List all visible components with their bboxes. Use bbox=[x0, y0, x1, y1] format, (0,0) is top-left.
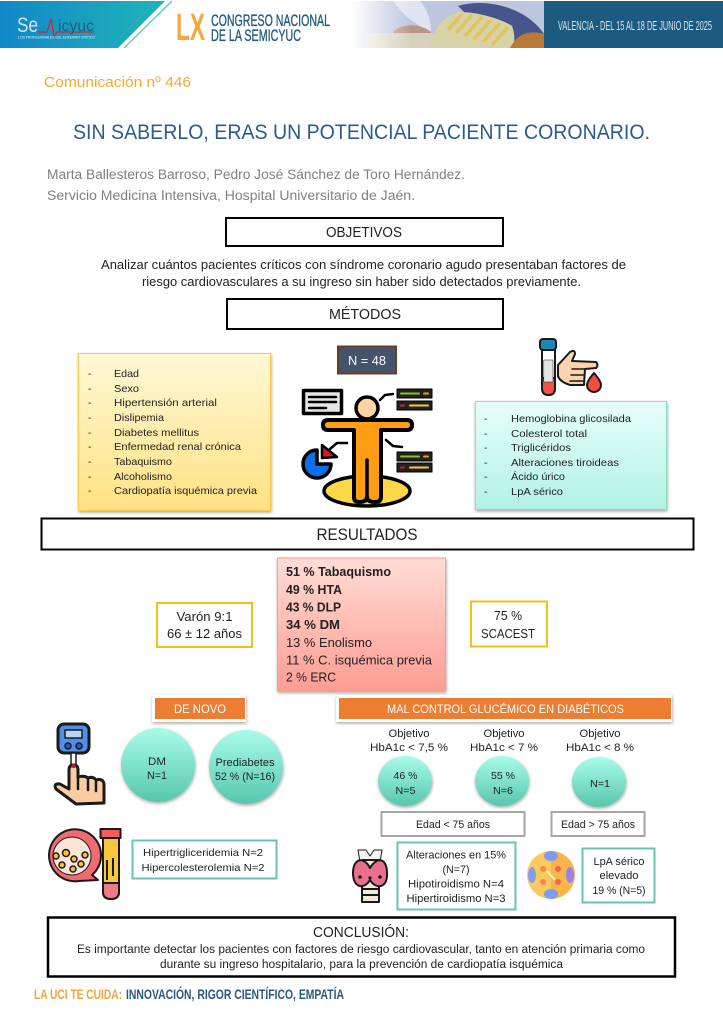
title: SIN SABERLO, ERAS UN POTENCIAL PACIENTE CORONARIO. bbox=[73, 121, 650, 144]
heading: de novo bbox=[152, 695, 246, 722]
circle: DM: DM bbox=[148, 756, 166, 768]
logo SEMICYUC: Se bbox=[17, 14, 38, 37]
panel: clinical variables: Alcoholismo bbox=[114, 471, 172, 483]
panel: clinical variables: - bbox=[88, 368, 92, 380]
logo SEMICYUC: icyuc bbox=[58, 18, 94, 35]
label: objetivo 7: Objetivo bbox=[484, 728, 524, 740]
panel: clinical variables: Diabetes mellitus bbox=[114, 427, 199, 439]
header diagonal line bbox=[124, 1, 172, 48]
circle: N=1: N=1 bbox=[590, 778, 610, 790]
panel: risk factor prevalence: 49 % HTA bbox=[286, 583, 342, 597]
objectives text: Analizar cuántos pacientes críticos con síndrome coronario agudo presentaban factores de bbox=[101, 258, 626, 272]
panel: laboratory variables: Hemoglobina glicosilada bbox=[511, 413, 631, 425]
header blue logo panel bbox=[0, 1, 165, 48]
circle: prediabetes bbox=[209, 730, 283, 804]
conclusion heading: CONCLUSIÓN: bbox=[313, 924, 409, 941]
label: objetivo 7,5: Objetivo bbox=[388, 728, 430, 740]
panel: laboratory variables: - bbox=[484, 413, 488, 425]
authors and affiliation: Marta Ballesteros Barroso, Pedro José Sánchez de Toro Hernández. bbox=[47, 167, 465, 182]
authors and affiliation bbox=[47, 167, 465, 203]
panel: clinical variables: Sexo bbox=[114, 383, 139, 395]
panel: laboratory variables: LpA sérico bbox=[511, 486, 563, 498]
panel: clinical variables: Tabaquismo bbox=[114, 456, 172, 468]
icon: person with data bbox=[303, 389, 432, 506]
panel: risk factor prevalence: 2 % ERC bbox=[286, 670, 336, 684]
panel: risk factor prevalence bbox=[278, 558, 446, 691]
sample size badge: N = 48 bbox=[348, 353, 386, 368]
panel: clinical variables: Enfermedad renal crónica bbox=[114, 441, 241, 453]
box: thyroid disorders: Hipotiroidismo N=4 bbox=[408, 878, 504, 890]
panel: laboratory variables: - bbox=[484, 457, 488, 469]
panel: clinical variables: - bbox=[88, 456, 92, 468]
circle: N=1 bbox=[572, 757, 626, 807]
circle: 46 % bbox=[378, 756, 432, 806]
label: objetivo 7: HbA1c < 7 % bbox=[470, 742, 538, 754]
panel: laboratory variables: Triglicéridos bbox=[511, 442, 571, 454]
congress numeral LX: LX bbox=[176, 7, 205, 49]
label: objetivo 7,5: HbA1c < 7,5 % bbox=[370, 742, 448, 754]
panel: clinical variables: Hipertensión arterial bbox=[114, 397, 217, 409]
box: thyroid disorders: Alteraciones en 15% bbox=[406, 850, 506, 862]
box: LpA: elevado bbox=[600, 870, 638, 882]
box: SCACEST: SCACEST bbox=[481, 627, 535, 641]
header date panel bbox=[544, 1, 723, 48]
heading: mal control glucémico: MAL CONTROL GLUCÉMICO EN DIABÉTICOS bbox=[387, 701, 624, 716]
box: SCACEST bbox=[471, 602, 547, 646]
circle: prediabetes: Prediabetes bbox=[216, 757, 275, 769]
panel: laboratory variables bbox=[476, 402, 666, 510]
circle: DM: N=1 bbox=[147, 770, 167, 782]
label: objetivo 8 bbox=[566, 728, 634, 754]
panel: conclusion bbox=[48, 918, 675, 976]
heading: métodos bbox=[227, 299, 503, 329]
box: LpA: LpA sérico bbox=[594, 856, 644, 868]
box: age under 75: Edad < 75 años bbox=[416, 819, 490, 831]
panel: risk factor prevalence: 43 % DLP bbox=[286, 600, 341, 614]
circle: 55 % bbox=[475, 756, 529, 806]
panel: laboratory variables: - bbox=[484, 428, 488, 440]
sample size badge bbox=[338, 346, 396, 374]
panel: clinical variables: Dislipemia bbox=[114, 412, 164, 424]
heading: mal control glucémico bbox=[336, 695, 672, 722]
congress title: CONGRESO NACIONAL bbox=[211, 11, 330, 30]
logo SEMICYUC bbox=[17, 14, 95, 40]
box: SCACEST: 75 % bbox=[494, 609, 522, 623]
circle: 55 %: 55 % bbox=[491, 770, 515, 782]
icon: lipids in blood bbox=[49, 829, 120, 899]
box: sex and age: Varón 9:1 bbox=[176, 610, 233, 624]
circle: 46 %: 46 % bbox=[394, 770, 418, 782]
box: sex and age: 66 ± 12 años bbox=[167, 627, 242, 641]
footer slogan bbox=[34, 985, 344, 1002]
conclusion text: Es importante detectar los pacientes con factores de riesgo cardiovascular, tanto en atención primaria como bbox=[77, 944, 645, 956]
conclusion text bbox=[77, 944, 645, 971]
label: objetivo 8: HbA1c < 8 % bbox=[566, 742, 634, 754]
circle: prediabetes: 52 % (N=16) bbox=[215, 771, 275, 783]
panel: clinical variables: - bbox=[88, 427, 92, 439]
panel: clinical variables: Cardiopatía isquémica previa bbox=[114, 485, 257, 497]
panel: clinical variables: - bbox=[88, 485, 92, 497]
panel: risk factor prevalence: 11 % C. isquémica previa bbox=[286, 654, 432, 668]
panel: clinical variables: Edad bbox=[114, 368, 139, 380]
heading: resultados bbox=[42, 518, 694, 550]
panel: laboratory variables: Ácido úrico bbox=[511, 470, 565, 483]
panel: clinical variables: - bbox=[88, 412, 92, 424]
box: LpA bbox=[582, 848, 654, 902]
authors and affiliation: Servicio Medicina Intensiva, Hospital Universitario de Jaén. bbox=[47, 188, 415, 203]
conclusion text: durante su ingreso hospitalario, para la prevención de cardiopatía isquémica bbox=[160, 959, 564, 971]
objectives text bbox=[101, 258, 626, 289]
label: objetivo 7 bbox=[470, 728, 538, 754]
box: thyroid disorders bbox=[398, 842, 516, 910]
icon: thyroid bbox=[353, 850, 387, 902]
congress title bbox=[211, 11, 330, 45]
heading: objetivos bbox=[226, 218, 503, 246]
circle: 46 %: N=5 bbox=[396, 785, 416, 797]
panel: clinical variables: - bbox=[88, 471, 92, 483]
label: objetivo 7,5 bbox=[370, 728, 448, 754]
panel: risk factor prevalence: 51 % Tabaquismo bbox=[286, 565, 391, 579]
footer slogan: INNOVACIÓN, RIGOR CIENTÍFICO, EMPATÍA bbox=[126, 985, 344, 1002]
circle: DM bbox=[121, 728, 195, 802]
box: LpA: 19 % (N=5) bbox=[592, 885, 646, 897]
box: thyroid disorders: (N=7) bbox=[442, 864, 470, 876]
box: age over 75: Edad > 75 años bbox=[561, 819, 635, 831]
box: dyslipidemia bbox=[132, 840, 276, 878]
heading: resultados: RESULTADOS bbox=[316, 526, 418, 544]
box: thyroid disorders: Hipertiroidismo N=3 bbox=[406, 893, 506, 905]
panel: risk factor prevalence: 13 % Enolismo bbox=[286, 636, 372, 650]
header banner bbox=[0, 1, 723, 49]
icon: blood tube and finger bbox=[540, 339, 601, 395]
box: dyslipidemia: Hipertrigliceridemia N=2 bbox=[143, 847, 263, 859]
logo SEMICYUC: LOS PROFESIONALES DEL ENFERMO CRÍTICO bbox=[18, 36, 95, 40]
communication number: Comunicación nº 446 bbox=[44, 74, 191, 91]
panel: laboratory variables: - bbox=[484, 442, 488, 454]
box: age over 75 bbox=[552, 812, 644, 836]
panel: laboratory variables: Colesterol total bbox=[511, 428, 587, 440]
heading: objetivos: OBJETIVOS bbox=[326, 225, 402, 241]
header photo of Valencia bbox=[352, 1, 544, 48]
box: sex and age bbox=[157, 603, 252, 647]
box: dyslipidemia: Hipercolesterolemia N=2 bbox=[142, 862, 265, 874]
icon: glucometer and finger bbox=[55, 724, 104, 804]
panel: laboratory variables: Alteraciones tiroideas bbox=[511, 457, 619, 469]
footer slogan: LA UCI TE CUIDA: bbox=[34, 986, 122, 1002]
label: objetivo 8: Objetivo bbox=[580, 728, 620, 740]
panel: clinical variables bbox=[78, 354, 270, 510]
panel: clinical variables: - bbox=[88, 397, 92, 409]
panel: clinical variables: - bbox=[88, 441, 92, 453]
congress title: DE LA SEMICYUC bbox=[211, 26, 301, 45]
heading: métodos: MÉTODOS bbox=[329, 306, 401, 323]
panel: laboratory variables: - bbox=[484, 471, 488, 483]
objectives text: riesgo cardiovasculares a su ingreso sin haber sido detectados previamente. bbox=[142, 275, 581, 289]
box: age under 75 bbox=[382, 812, 524, 836]
icon: LpA particle bbox=[527, 851, 575, 899]
circle: 55 %: N=6 bbox=[493, 785, 513, 797]
panel: laboratory variables: - bbox=[484, 486, 488, 498]
heading: de novo: DE NOVO bbox=[174, 702, 226, 716]
panel: risk factor prevalence: 34 % DM bbox=[286, 618, 340, 632]
panel: clinical variables: - bbox=[88, 383, 92, 395]
